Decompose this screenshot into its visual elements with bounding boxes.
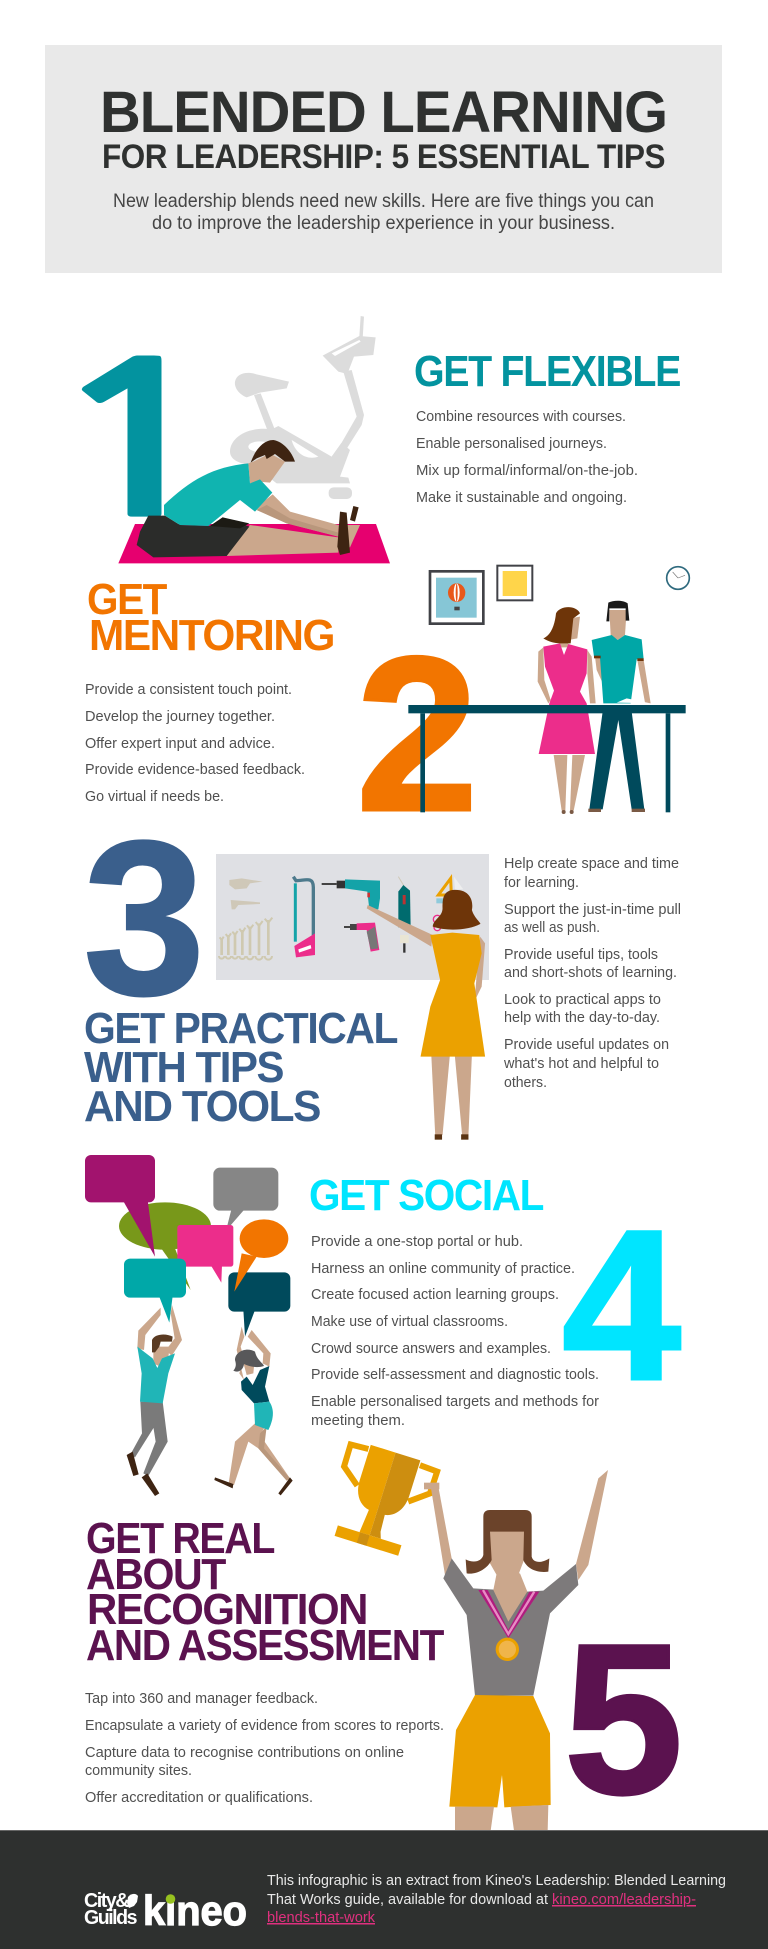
tip 3 list: Support the just-in-time pull: [504, 901, 681, 918]
heading: get flexible: GET FLEXIBLE: [414, 347, 680, 396]
tip 1 list: Enable personalised journeys.: [416, 435, 607, 452]
grey speech bubble: [213, 1168, 278, 1231]
tip 2 list: Go virtual if needs be.: [85, 788, 224, 805]
tip 3 list: [503, 855, 681, 1091]
legs: [227, 525, 338, 556]
heading: get practical with tips and tools: WITH TIPS: [84, 1043, 283, 1092]
tip 5 list: community sites.: [85, 1762, 192, 1779]
panel: tip 5 get real: [85, 1439, 683, 1839]
logo: city and guilds: [84, 1890, 138, 1929]
footer text: blends-that-work: [267, 1909, 375, 1926]
pink speech bubble: [177, 1225, 233, 1283]
number 4: 4: [562, 1186, 681, 1425]
tip 5 list: [85, 1690, 444, 1806]
icon: power drill: [322, 879, 380, 909]
man holding bubble: [127, 1305, 182, 1496]
tip 4 list: Enable personalised targets and methods for: [311, 1393, 599, 1410]
tip 5 list: Offer accreditation or qualifications.: [85, 1789, 313, 1806]
title: BLENDED LEARNING: [100, 80, 667, 145]
illustration: man stretching with exercise bike: [118, 316, 390, 563]
shorts: [449, 1695, 551, 1807]
tip 4 list: [311, 1233, 599, 1429]
tip 4 list: Harness an online community of practice.: [311, 1260, 575, 1277]
medal: [478, 1590, 539, 1661]
heading: get social: GET SOCIAL: [309, 1171, 544, 1220]
teal speech bubble: [124, 1259, 186, 1323]
icon: trophy: [323, 1439, 439, 1559]
icon: pliers and caliper: [229, 878, 263, 909]
hair: [466, 1510, 549, 1574]
heading: get mentoring: GET: [87, 575, 167, 624]
tip 3 list: others.: [504, 1074, 547, 1091]
woman: [538, 607, 596, 814]
shirt: [443, 1558, 578, 1696]
tip 1 list: Mix up formal/informal/on-the-job.: [416, 462, 638, 479]
logo: kineo: kineo: [143, 1887, 247, 1934]
panel: tip 2 get mentoring: [85, 566, 689, 857]
icon: cordless screwdriver: [344, 923, 379, 952]
feet and shoes: [338, 525, 360, 547]
heading: get practical with tips and tools: [84, 1004, 398, 1131]
heading: get mentoring: [87, 575, 334, 660]
tip 1 list: Make it sustainable and ongoing.: [416, 489, 627, 506]
icon: exercise bike: [230, 316, 376, 499]
footer text: kineo.com/leadership-: [552, 1891, 696, 1908]
tip 4 list: Provide self-assessment and diagnostic tools.: [311, 1366, 599, 1383]
tip 5 list: Encapsulate a variety of evidence from scores to reports.: [85, 1717, 444, 1734]
woman reaching to tool board: [367, 890, 485, 1140]
panel: tip 1 get flexible: [41, 316, 680, 563]
table: [408, 705, 686, 812]
footer: [0, 1830, 768, 1949]
icon: wrenches: [219, 918, 272, 960]
panel: tip 4 get social: [85, 1155, 681, 1496]
tip 5 list: Tap into 360 and manager feedback.: [85, 1690, 318, 1707]
intro text: New leadership blends need new skills. Here are five things you can: [113, 191, 654, 212]
tip 3 list: what's hot and helpful to: [503, 1055, 659, 1072]
intro text: [113, 191, 654, 234]
illustration: woman with trophy and medal: [323, 1439, 608, 1831]
green speech bubble: [119, 1202, 211, 1290]
icon: set square and scissors: [433, 877, 463, 931]
number 5: 5: [564, 1600, 683, 1839]
legs: [455, 1805, 548, 1831]
neck: [493, 1573, 527, 1622]
footer text: That Works guide, available for download at: [267, 1891, 549, 1908]
shirt: [164, 463, 272, 526]
tip 2 list: [85, 681, 305, 805]
logo: city and guilds: City&: [84, 1890, 129, 1912]
tip 2 list: Offer expert input and advice.: [85, 735, 275, 752]
number 3: 3: [83, 795, 205, 1041]
tip 3 list: and short-shots of learning.: [504, 964, 677, 981]
tip 3 list: Provide useful tips, tools: [504, 946, 658, 963]
icon: clock: [667, 567, 689, 589]
heading: get mentoring: MENTORING: [89, 611, 334, 660]
man: [588, 601, 651, 812]
heading: get real about recognition and assessment: RECOGNITION: [87, 1585, 367, 1634]
tip 4 list: Make use of virtual classrooms.: [311, 1313, 508, 1330]
heading: get real about recognition and assessment: AND ASSESSMENT: [86, 1621, 444, 1670]
tool board: [216, 854, 489, 980]
footer text: This infographic is an extract from Kineo's Leadership: Blended Learning: [267, 1872, 726, 1889]
illustration: people holding speech bubbles: [85, 1155, 293, 1496]
subtitle: FOR LEADERSHIP: 5 ESSENTIAL TIPS: [102, 138, 665, 176]
logo: city and guilds: Guilds: [84, 1907, 137, 1929]
orange speech bubble: [234, 1219, 288, 1292]
number 2: 2: [356, 611, 478, 857]
dark speech bubble: [228, 1272, 290, 1337]
heading: get practical with tips and tools: AND TOOLS: [84, 1082, 320, 1131]
heading: get practical with tips and tools: GET PRACTICAL: [84, 1004, 398, 1053]
raised arms: [424, 1470, 608, 1580]
tip 5 list: Capture data to recognise contributions on online: [85, 1744, 404, 1761]
heading: get real about recognition and assessment: ABOUT: [86, 1550, 227, 1599]
tip 4 list: Provide a one-stop portal or hub.: [311, 1233, 523, 1250]
intro text: do to improve the leadership experience in your business.: [152, 213, 615, 234]
tip 3 list: Look to practical apps to: [504, 991, 661, 1008]
tip 1 list: Combine resources with courses.: [416, 408, 626, 425]
tip 3 list: Provide useful updates on: [504, 1036, 669, 1053]
icon: hacksaw: [293, 877, 315, 957]
footer text: [267, 1872, 726, 1926]
picture frame with balloon: [430, 571, 483, 624]
header panel: [45, 45, 722, 273]
tip 3 list: Help create space and time: [504, 855, 679, 872]
tip 2 list: Provide evidence-based feedback.: [85, 761, 305, 778]
icon: teal drill: [398, 877, 411, 953]
face: [490, 1530, 524, 1575]
number 1: 1: [41, 339, 234, 548]
head: [248, 453, 285, 483]
tip 1 list: [416, 408, 638, 506]
picture frame yellow: [497, 566, 532, 600]
arm: [257, 494, 338, 537]
illustration: mentor and mentee at table: [408, 566, 689, 814]
panel: tip 3 get practical: [83, 795, 681, 1140]
shorts: [137, 516, 249, 557]
woman holding bubble: [214, 1327, 293, 1495]
tip 2 list: Provide a consistent touch point.: [85, 681, 292, 698]
tip 4 list: meeting them.: [311, 1412, 405, 1429]
tip 3 list: for learning.: [504, 874, 579, 891]
tip 4 list: Create focused action learning groups.: [311, 1286, 559, 1303]
heading: get real about recognition and assessment: [86, 1514, 444, 1670]
tip 3 list: as well as push.: [504, 919, 600, 936]
tip 2 list: Develop the journey together.: [85, 708, 275, 725]
tip 3 list: help with the day-to-day.: [504, 1009, 660, 1026]
purple speech bubble: [85, 1155, 155, 1257]
tip 4 list: Crowd source answers and examples.: [311, 1340, 551, 1357]
mat: [118, 524, 390, 563]
heading: get real about recognition and assessment: GET REAL: [86, 1514, 275, 1563]
